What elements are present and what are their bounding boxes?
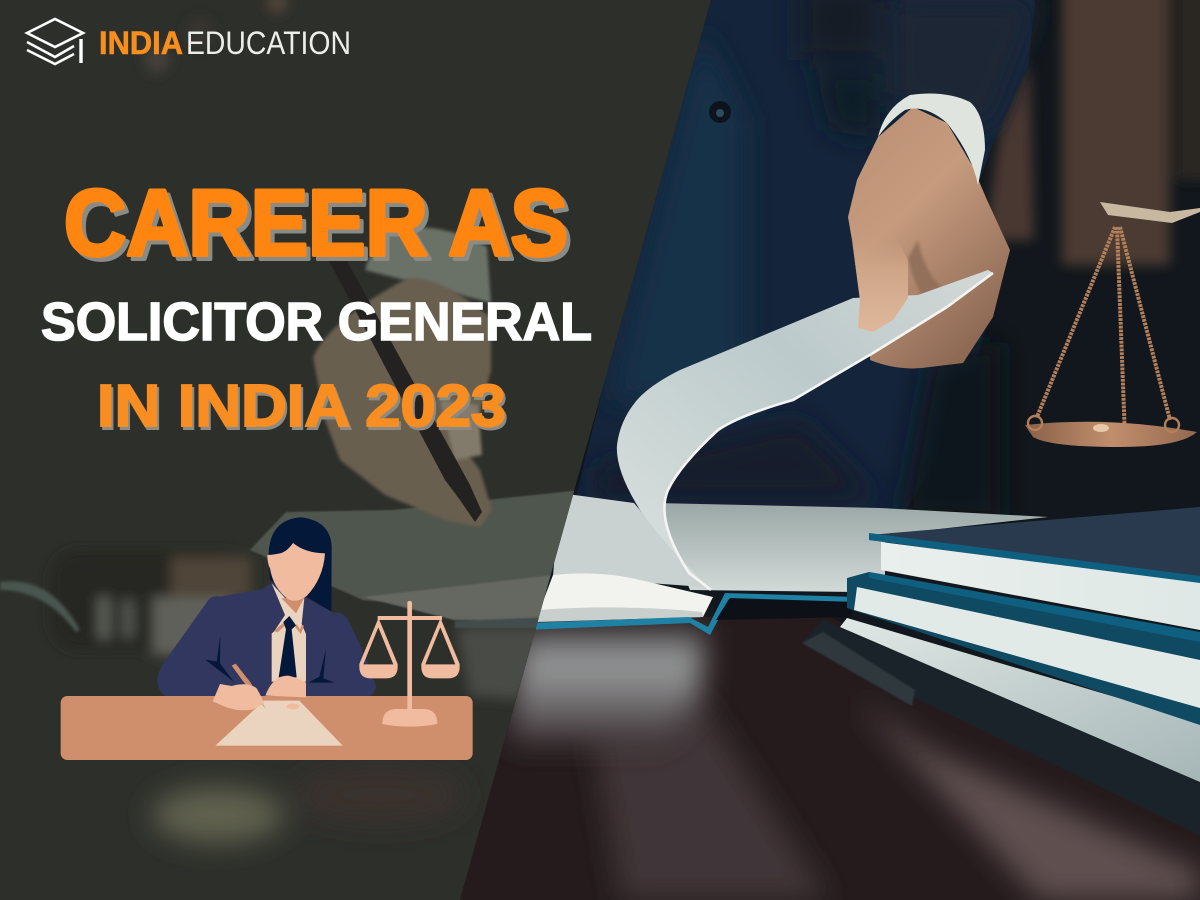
jacket: [570, 0, 1035, 520]
muted table reflection: [456, 628, 536, 702]
book three pages: [840, 618, 1200, 782]
table: [460, 617, 1200, 900]
muted pen: [326, 252, 482, 522]
jacket button: [709, 101, 731, 123]
thick white page block: [536, 573, 713, 620]
dark diagonal overlay panel: [0, 0, 720, 900]
title line 3: IN INDIA 2023: [97, 373, 506, 439]
jacket folds: [205, 635, 335, 683]
muted gavel: [50, 550, 251, 655]
muted writing hand: [313, 278, 492, 527]
desk: [61, 696, 473, 760]
right hand: [265, 676, 306, 697]
table reflections: [510, 630, 1200, 900]
hair back: [269, 517, 332, 612]
hanging brass scale: [1025, 202, 1200, 447]
writing hand: [213, 684, 264, 710]
title line 1: CAREER AS: [68, 174, 572, 279]
top cover: [869, 507, 1200, 582]
hair fringe: [269, 517, 332, 554]
dark gap under cover: [716, 599, 852, 620]
pencil: [232, 664, 266, 709]
bottom dark cover: [802, 620, 1200, 835]
turning page: [617, 270, 993, 590]
hand behind the page: [848, 107, 1010, 368]
blurred wall behind the scale: [985, 0, 1200, 265]
teal cover edge: [536, 593, 847, 635]
illustration: solicitor at desk: [61, 517, 473, 760]
left page: [553, 494, 688, 586]
title line 1: CAREER AS: [64, 170, 568, 275]
shirt cuff: [878, 94, 985, 185]
muted table glow: [152, 767, 465, 843]
muted fingertip highlight: [440, 400, 482, 460]
right page and gutter: [655, 503, 1048, 592]
logo: EDUCATION: [186, 25, 351, 61]
title line 2: SOLICITOR GENERAL: [41, 292, 592, 352]
shirt: [272, 583, 306, 682]
logo: [27, 19, 351, 64]
title: [41, 170, 592, 442]
face: [267, 543, 325, 601]
photo background: lawyer turning book pages: [460, 0, 1200, 900]
thumb over the page: [852, 235, 908, 332]
page white edge: [664, 273, 993, 590]
paper stamp: [286, 703, 300, 709]
title line 3: IN INDIA 2023: [99, 376, 508, 442]
muted paper: [250, 488, 600, 628]
muted sleeve and cuff: [365, 227, 491, 303]
book one pages: [881, 542, 1200, 630]
paper on desk: [215, 701, 343, 746]
page block lower shade: [536, 607, 703, 622]
neck shadow: [282, 597, 305, 613]
book two cover highlight: [869, 572, 1200, 642]
tie: [279, 616, 297, 677]
logo wordmark: INDIA: [99, 25, 183, 61]
book two cover: [847, 572, 1200, 725]
muted glass ornament: [0, 581, 80, 632]
jacket: [157, 583, 376, 707]
jacket light and shadow areas: [590, 0, 1040, 520]
finger crease: [908, 241, 941, 294]
collar shading: [274, 621, 304, 634]
logo icon: stacked books and cap: [27, 19, 83, 64]
book two pages: [854, 587, 1200, 708]
muted bokeh lights: [144, 0, 287, 73]
stack of books: [802, 507, 1200, 835]
table scale icon: [359, 601, 460, 727]
open book: [500, 493, 1048, 635]
top cover edge: [869, 533, 1200, 584]
